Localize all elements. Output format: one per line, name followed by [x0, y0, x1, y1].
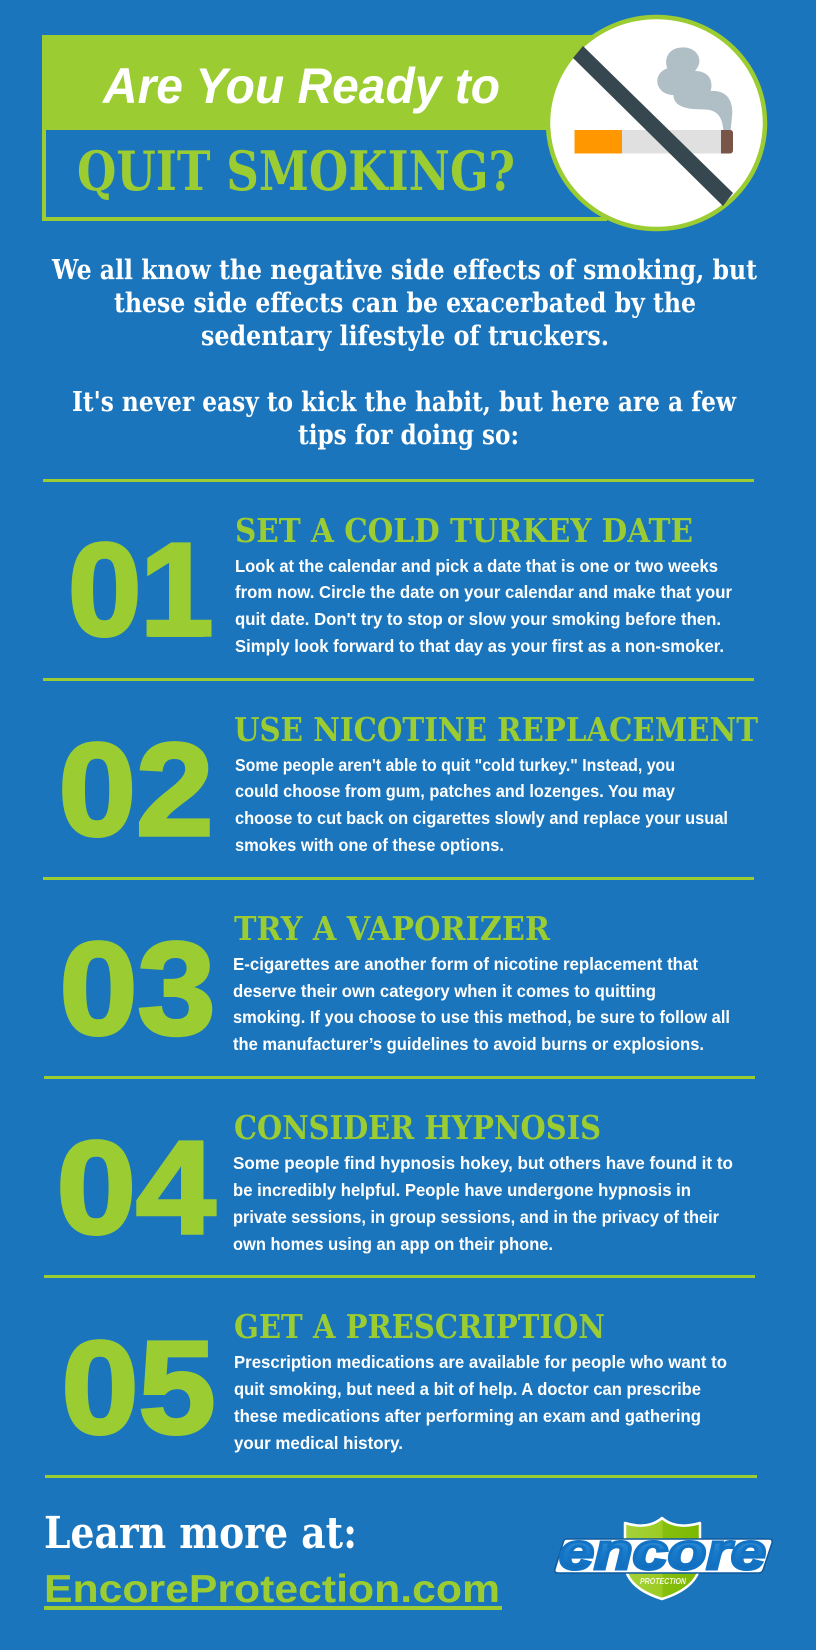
logo wordmark: encore	[559, 1523, 766, 1580]
footer call to action	[44, 1508, 502, 1611]
body 03	[233, 954, 730, 1054]
header banner	[42, 35, 605, 219]
body 04: private sessions, in group sessions, and in the privacy of their	[233, 1207, 719, 1227]
intro paragraph: tips for doing so:	[298, 420, 519, 451]
intro paragraph: these side effects can be exacerbated by the	[114, 288, 696, 319]
body 02	[235, 755, 728, 855]
body 02: smokes with one of these options.	[235, 835, 504, 855]
link underline	[44, 1606, 502, 1610]
heading 03: TRY A VAPORIZER	[234, 909, 551, 948]
body 03: deserve their own category when it comes to quitting	[233, 981, 656, 1001]
learn more text: Learn more at:	[44, 1508, 357, 1559]
title: are you ready to: Are You Ready to	[101, 58, 500, 114]
body 02: Some people aren't able to quit "cold turkey." Instead, you	[235, 755, 675, 775]
number 03: 03	[60, 915, 216, 1062]
body 01: from now. Circle the date on your calendar and make that your	[235, 582, 732, 602]
icon: prohibition slash	[573, 46, 733, 206]
website link: EncoreProtection.com	[44, 1568, 500, 1611]
body 01	[235, 556, 732, 656]
heading 01: SET A COLD TURKEY DATE	[235, 511, 693, 550]
number 05: 05	[62, 1314, 216, 1461]
green title band	[42, 35, 605, 128]
body 05: quit smoking, but need a bit of help. A doctor can prescribe	[234, 1379, 701, 1399]
icon: smoke	[657, 47, 732, 131]
tip 03	[60, 909, 730, 1062]
heading 04: CONSIDER HYPNOSIS	[234, 1108, 601, 1147]
body 03: smoking. If you choose to use this method, be sure to follow all	[233, 1007, 730, 1027]
number 01: 01	[68, 516, 213, 663]
icon: no smoking circle	[548, 17, 765, 229]
intro paragraph: sedentary lifestyle of truckers.	[201, 321, 609, 352]
title: quit smoking: QUIT SMOKING?	[77, 139, 515, 203]
logo tagline: PROTECTION	[640, 1576, 687, 1586]
body 05: Prescription medications are available for people who want to	[234, 1352, 727, 1372]
body 04: own homes using an app on their phone.	[233, 1234, 553, 1254]
body 01: quit date. Don't try to stop or slow your smoking before then.	[235, 609, 721, 629]
body 01: Simply look forward to that day as your first as a non-smoker.	[235, 636, 724, 656]
body 02: could choose from gum, patches and lozenges. You may	[235, 781, 675, 801]
number 04: 04	[56, 1114, 216, 1261]
tip 04	[56, 1108, 733, 1261]
tip 01	[68, 511, 732, 663]
body 03: E-cigarettes are another form of nicotine replacement that	[233, 954, 698, 974]
outlined subtitle box	[44, 128, 605, 219]
body 04	[233, 1153, 733, 1254]
body 04: Some people find hypnosis hokey, but others have found it to	[233, 1153, 733, 1173]
tip 02	[58, 710, 758, 863]
logo: encore protection	[555, 1518, 772, 1599]
body 01: Look at the calendar and pick a date that is one or two weeks	[235, 556, 718, 576]
body 05	[234, 1352, 727, 1453]
body 04: be incredibly helpful. People have undergone hypnosis in	[233, 1180, 691, 1200]
tip 05	[62, 1307, 727, 1461]
heading 02: USE NICOTINE REPLACEMENT	[234, 710, 758, 749]
body 05: these medications after performing an exam and gathering	[234, 1406, 701, 1426]
logo wordmark backing	[555, 1539, 772, 1573]
body 03: the manufacturer’s guidelines to avoid burns or explosions.	[233, 1034, 704, 1054]
icon: cigarette	[574, 130, 733, 154]
heading 05: GET A PRESCRIPTION	[234, 1307, 605, 1346]
logo shield	[625, 1518, 700, 1599]
intro paragraph	[51, 255, 757, 451]
number 02: 02	[58, 716, 214, 863]
body 02: choose to cut back on cigarettes slowly and replace your usual	[235, 808, 728, 828]
body 05: your medical history.	[234, 1433, 403, 1453]
